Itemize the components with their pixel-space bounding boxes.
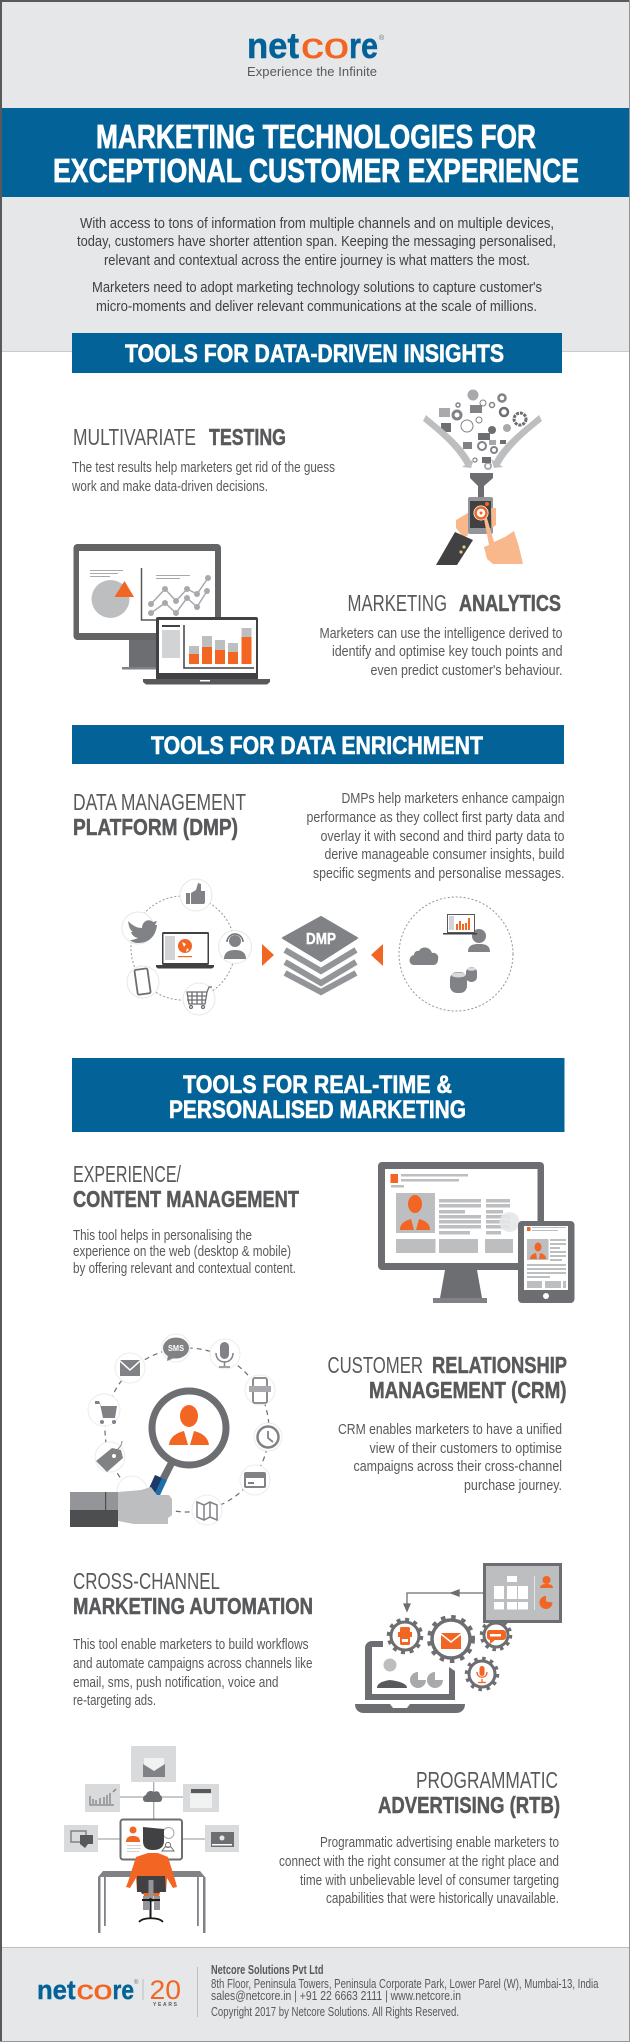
footer logo: netcore 20 years: ® xyxy=(134,1979,139,1986)
text block: cross-channel marketing automation: email, sms, push notification, voice and xyxy=(73,1674,278,1691)
icon: cart grey xyxy=(95,1401,117,1424)
icon: tablet xyxy=(134,968,151,995)
text block: multivariate testing: TESTING xyxy=(209,424,286,450)
ad box: browser xyxy=(183,1784,219,1812)
text block: marketing analytics: MARKETING xyxy=(348,590,447,616)
arrow: left xyxy=(371,944,383,966)
icon: cart xyxy=(187,987,212,1008)
section heading: data enrichment: TOOLS FOR DATA ENRICHMENT xyxy=(151,732,483,760)
text block: multivariate testing: The test results help marketers get rid of the guess xyxy=(72,459,335,476)
ad box: email xyxy=(131,1746,176,1782)
intro text: With access to tons of information from multiple channels and on multiple devices, xyxy=(80,215,554,232)
icon: database xyxy=(450,967,477,993)
icon: headset agent xyxy=(224,934,246,959)
text block: marketing analytics xyxy=(320,590,562,679)
gears xyxy=(388,1617,510,1690)
heading: data management platform: DATA MANAGEMENT xyxy=(73,789,246,815)
icon: data funnel into phone xyxy=(423,390,542,565)
logo: netcore: net xyxy=(247,25,299,66)
icon: phone xyxy=(249,1378,271,1403)
monitor xyxy=(74,544,221,670)
heading: data management platform xyxy=(73,789,246,840)
intro text: relevant and contextual across the entire journey is what matters the most. xyxy=(104,252,530,269)
tablet xyxy=(518,1221,574,1303)
text block: experience content management: experience on the web (desktop & mobile) xyxy=(73,1243,291,1260)
text block: experience content management xyxy=(73,1161,299,1277)
text block: experience content management: by offering relevant and contextual content. xyxy=(73,1260,296,1277)
text block: programmatic advertising: connect with the right consumer at the right place and xyxy=(279,1853,559,1870)
text block: experience content management: EXPERIENCE/ xyxy=(73,1161,181,1187)
text block: cross-channel marketing automation: and automate campaigns across channels like xyxy=(73,1655,312,1672)
logo: netcore xyxy=(247,25,385,79)
text block: marketing analytics: even predict customer's behaviour. xyxy=(370,662,562,679)
icon: card xyxy=(244,1472,266,1488)
arrow: workflow xyxy=(404,1590,483,1611)
monitor xyxy=(120,1820,182,1860)
text block: DMP description: performance as they collect first party data and xyxy=(306,809,564,826)
text block: DMP description: specific segments and personalise messages. xyxy=(313,865,564,882)
text block: multivariate testing: work and make data-driven decisions. xyxy=(71,478,268,495)
text block: DMP description: DMPs help marketers enhance campaign xyxy=(342,790,564,807)
text block: cross-channel marketing automation: This tool enable marketers to build workflows xyxy=(73,1636,308,1653)
title banner xyxy=(0,108,630,197)
footer contact details: Copyright 2017 by Netcore Solutions. All Rights Reserved. xyxy=(211,2004,459,2019)
icon: cloud xyxy=(143,1791,162,1802)
laptop xyxy=(355,1641,465,1713)
diagram: customer relationship ring xyxy=(70,1334,282,1527)
footer logo: netcore 20 years: co xyxy=(76,1975,112,2005)
icon: cloud xyxy=(410,947,438,965)
icon: price tag xyxy=(96,1441,123,1472)
section heading: real-time and personalised marketing: TOOLS FOR REAL-TIME & xyxy=(183,1071,452,1099)
section heading: data-driven insights xyxy=(72,333,562,373)
diagram: data sources ring xyxy=(122,879,252,1015)
text block: multivariate testing xyxy=(71,424,335,495)
text block: cross-channel marketing automation: CROSS-CHANNEL xyxy=(73,1568,220,1594)
section heading: real-time and personalised marketing xyxy=(72,1058,564,1132)
text block: programmatic advertising: Programmatic advertising enable marketers to xyxy=(320,1834,559,1851)
icon: DMP stack: DMP xyxy=(306,931,336,948)
section heading: real-time and personalised marketing: PERSONALISED MARKETING xyxy=(169,1096,466,1124)
section heading: data enrichment xyxy=(72,725,564,764)
intro text xyxy=(77,215,556,315)
logo: netcore: co xyxy=(301,25,349,66)
footer contact details xyxy=(211,1962,599,2019)
text block: customer relationship management: CUSTOMER xyxy=(328,1352,423,1378)
text block: experience content management: This tool helps in personalising the xyxy=(73,1227,252,1244)
text block: marketing analytics: Marketers can use the intelligence derived to xyxy=(320,625,562,642)
icon: monitor and laptop analytics xyxy=(74,544,270,684)
text block: customer relationship management: campaigns across their cross-channel xyxy=(354,1458,562,1475)
ad box: chat xyxy=(64,1825,98,1852)
diagram: external data circle xyxy=(399,897,513,1011)
text block: customer relationship management: CRM enables marketers to have a unified xyxy=(338,1421,562,1438)
icon: clock xyxy=(258,1426,278,1448)
text block: customer relationship management: purchase journey. xyxy=(464,1477,562,1494)
footer logo: netcore 20 years: 20 xyxy=(150,1975,181,2005)
text block: customer relationship management: MANAGEMENT (CRM) xyxy=(369,1377,566,1403)
icon: DMP stack xyxy=(283,917,357,992)
icon: mail xyxy=(120,1360,140,1376)
text block: programmatic advertising: ADVERTISING (RTB) xyxy=(378,1792,560,1818)
icon: map xyxy=(197,1502,217,1520)
text block: experience content management: CONTENT MANAGEMENT xyxy=(73,1186,299,1212)
footer logo: netcore 20 years xyxy=(37,1975,181,2008)
footer contact details: sales@netcore.in | +91 22 6663 2111 | www.netcore.in xyxy=(211,1988,461,2003)
ad box: chart xyxy=(85,1784,120,1812)
text block: customer relationship management: view of their customers to optimise xyxy=(370,1440,562,1457)
logo: netcore: ® xyxy=(379,34,385,42)
ad box: video xyxy=(205,1825,239,1852)
icon: automation gears and laptop xyxy=(355,1564,560,1713)
icon: person orange xyxy=(400,1195,430,1230)
text block: cross-channel marketing automation: MARKETING AUTOMATION xyxy=(73,1593,313,1619)
icon: microphone xyxy=(216,1342,233,1367)
text block: DMP description: derive manageable consumer insights, build xyxy=(324,846,564,863)
text block: multivariate testing: MULTIVARIATE xyxy=(73,424,196,450)
icon: hand and cuff xyxy=(70,1487,172,1527)
intro text: Marketers need to adopt marketing technology solutions to capture customer's xyxy=(92,279,542,296)
footer logo: netcore 20 years: YEARS xyxy=(153,2002,178,2008)
logo: netcore: Experience the Infinite xyxy=(247,64,377,79)
text block: programmatic advertising: time with unbelievable level of consumer targeting xyxy=(300,1872,559,1889)
text block: customer relationship management xyxy=(328,1352,567,1494)
text block: marketing analytics: identify and optimise key touch points and xyxy=(332,643,562,660)
text block: DMP description xyxy=(306,790,564,882)
icon: desktop and tablet content xyxy=(378,1162,574,1303)
text block: programmatic advertising xyxy=(279,1767,560,1907)
footer logo: netcore 20 years: re xyxy=(112,1975,134,2005)
icon: laptop with globe xyxy=(156,932,214,968)
laptop xyxy=(143,617,270,684)
person at desk xyxy=(126,1827,177,1922)
icon: magnifier with customer xyxy=(146,1391,226,1495)
icon: programmatic advertising desk xyxy=(64,1746,239,1933)
intro text: today, customers have shorter attention span. Keeping the messaging personalised, xyxy=(77,233,556,250)
section heading: data-driven insights: TOOLS FOR DATA-DRIVEN INSIGHTS xyxy=(125,340,504,368)
text block: marketing analytics: ANALYTICS xyxy=(459,590,561,616)
text block: customer relationship management: RELATIONSHIP xyxy=(432,1352,567,1378)
icon: SMS xyxy=(163,1338,189,1361)
text block: programmatic advertising: capabilities that were historically unavailable. xyxy=(326,1890,559,1907)
icon: twitter xyxy=(128,920,157,943)
desk xyxy=(98,1871,206,1933)
icon: SMS: SMS xyxy=(168,1344,185,1353)
heading: data management platform: PLATFORM (DMP) xyxy=(73,814,238,840)
text block: DMP description: overlay it with second and third party data to xyxy=(320,828,564,845)
logo: netcore: re xyxy=(349,25,378,66)
text block: cross-channel marketing automation: re-targeting ads. xyxy=(73,1692,156,1709)
arrow: right xyxy=(262,944,274,966)
icon: thumbs up xyxy=(186,883,205,904)
icon: person with laptop xyxy=(443,914,490,952)
footer logo: netcore 20 years: net xyxy=(37,1975,76,2005)
text block: cross-channel marketing automation xyxy=(73,1568,313,1709)
panel: workflow board xyxy=(484,1564,560,1622)
footer contact details: Netcore Solutions Pvt Ltd xyxy=(211,1962,324,1977)
intro text: micro-moments and deliver relevant communications at the scale of millions. xyxy=(96,298,537,315)
text block: programmatic advertising: PROGRAMMATIC xyxy=(416,1767,558,1793)
